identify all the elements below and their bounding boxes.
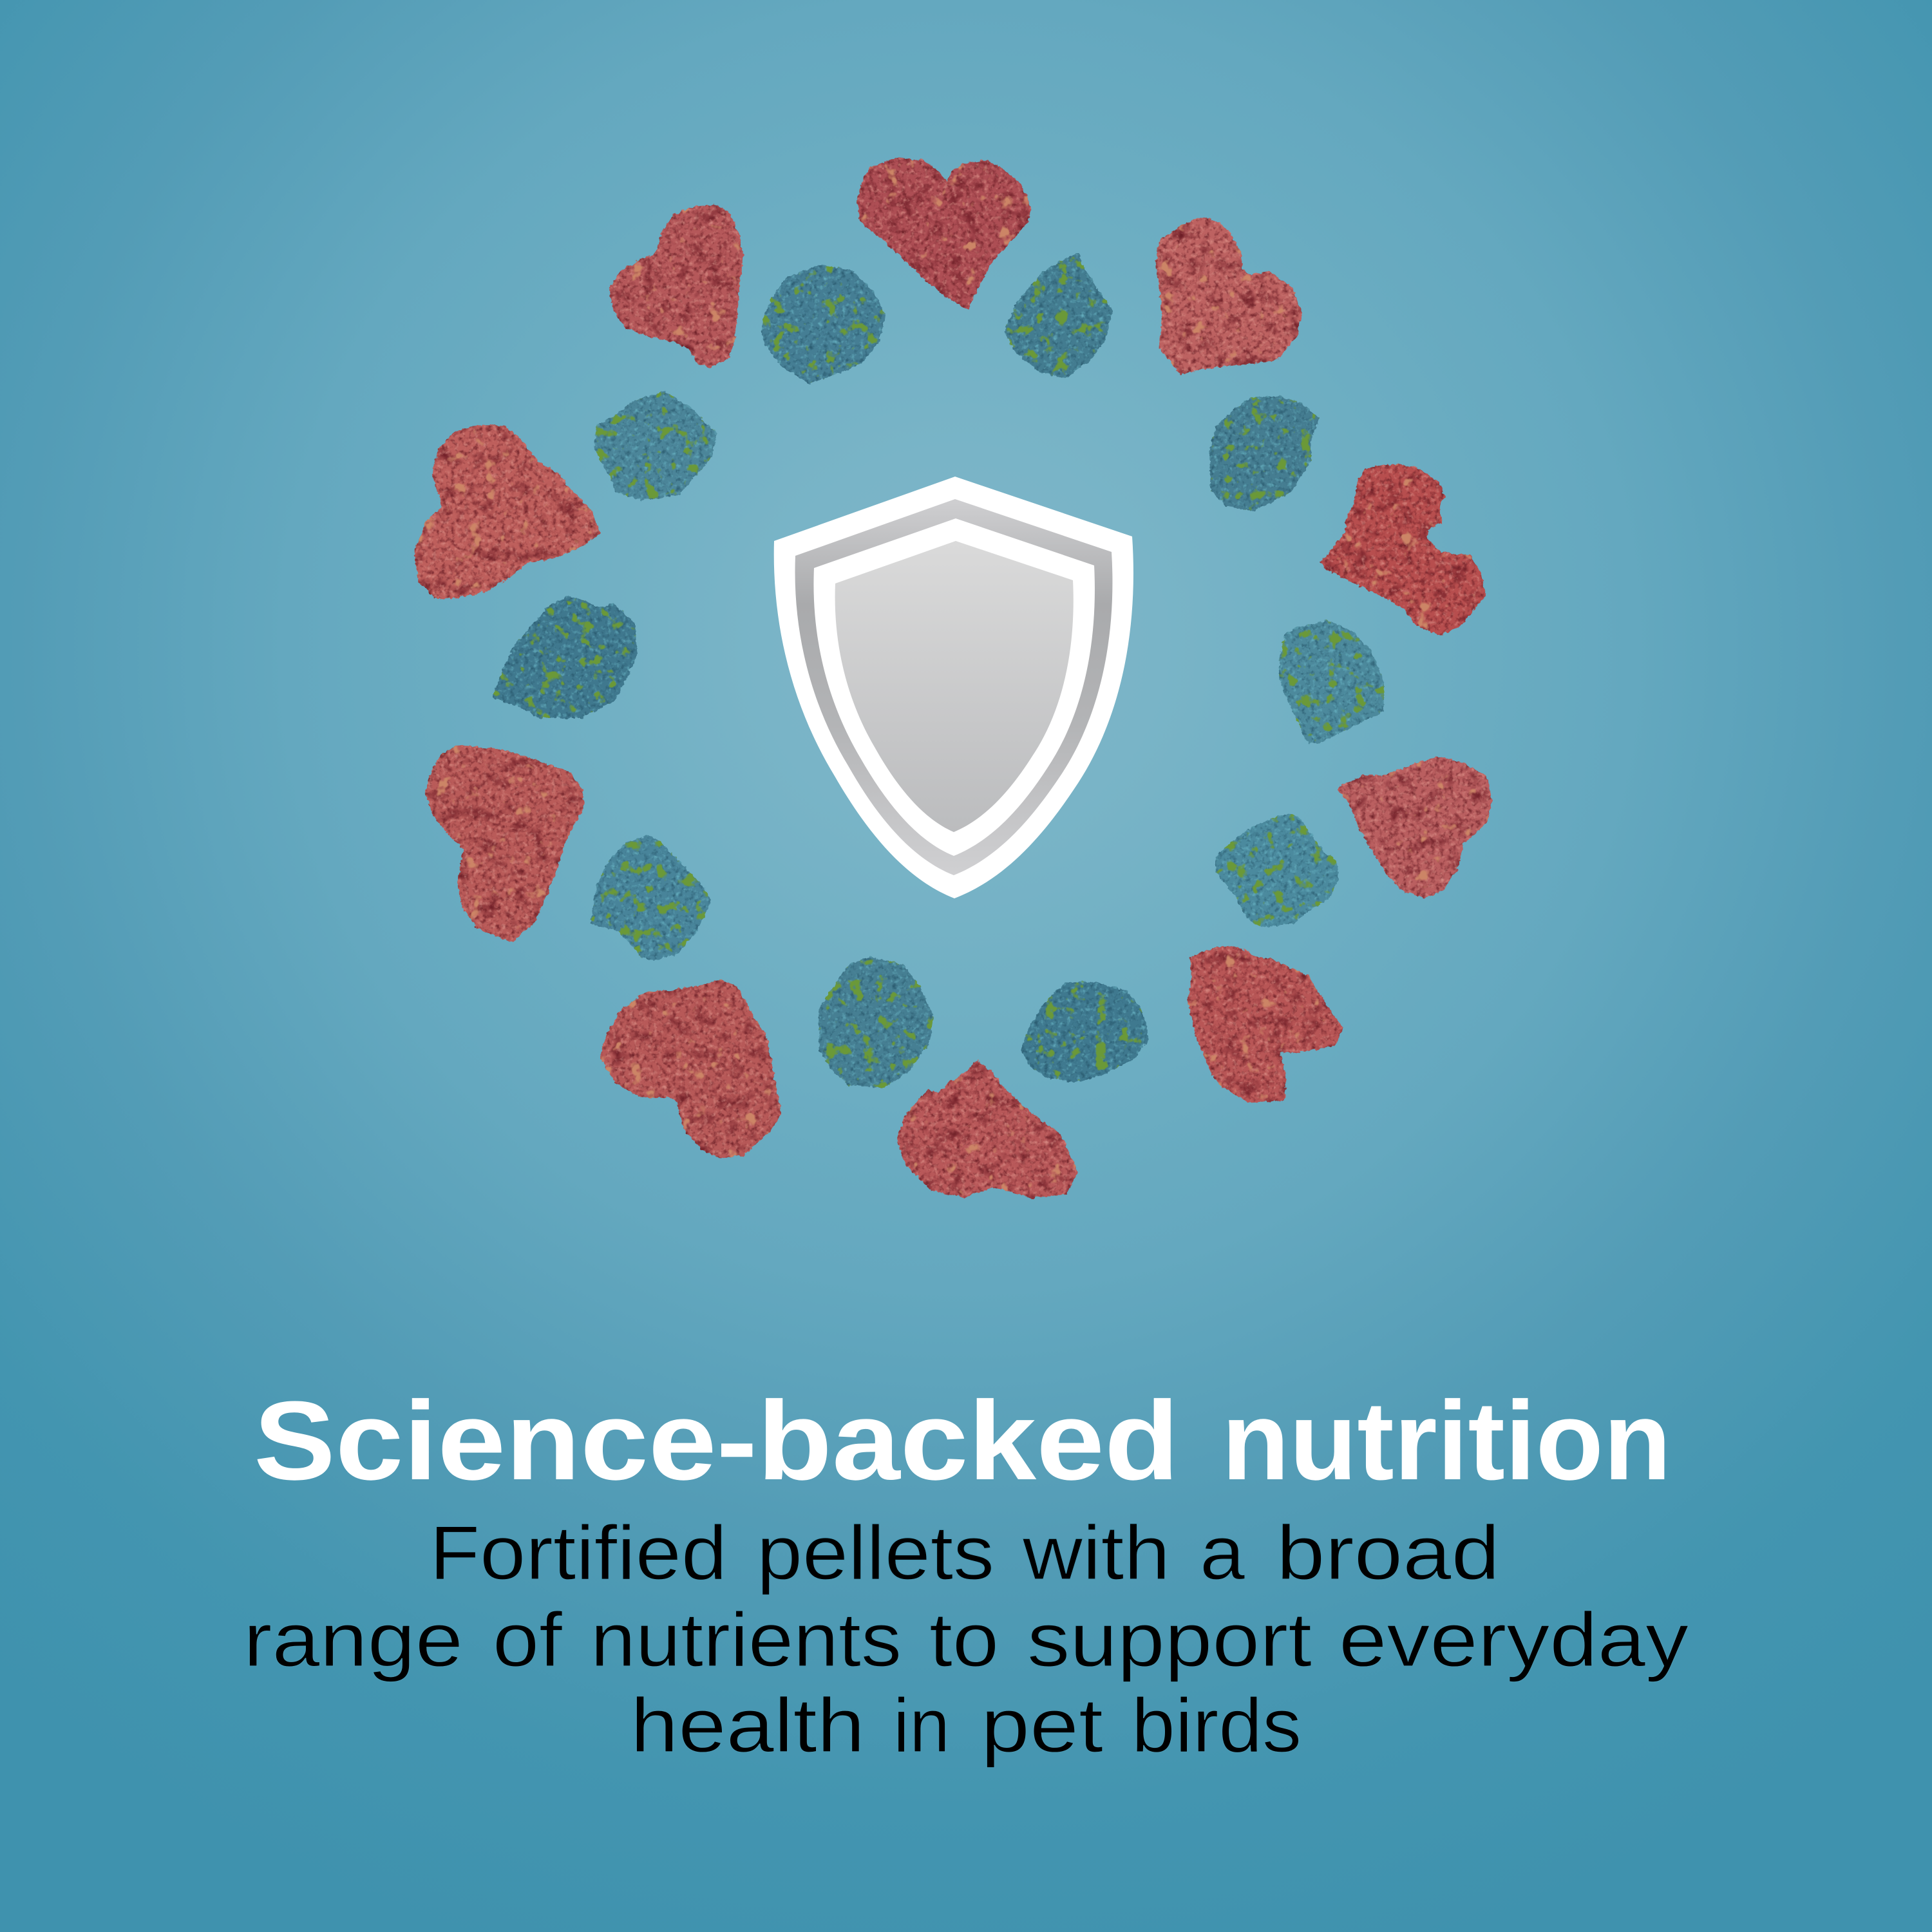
body text: birds — [1132, 1683, 1302, 1768]
blue pellet: right — [1280, 621, 1383, 743]
body text: nutrients — [591, 1597, 902, 1683]
body text: with — [1022, 1510, 1170, 1596]
blue pellet: lower right — [1217, 815, 1338, 926]
body text: of — [493, 1597, 563, 1683]
body text — [243, 1510, 1689, 1768]
heart pellet: lower right side — [1338, 757, 1491, 896]
body text: health — [630, 1683, 865, 1768]
body text: pellets — [757, 1510, 994, 1596]
body text: pet — [981, 1683, 1103, 1768]
heading — [254, 1378, 1671, 1503]
pellet ring — [415, 159, 1491, 1197]
body text: a — [1200, 1510, 1245, 1596]
body text: broad — [1276, 1510, 1500, 1596]
body text: range — [243, 1597, 463, 1683]
body text: everyday — [1339, 1597, 1689, 1683]
body text: Fortified — [430, 1510, 727, 1596]
shield icon — [774, 477, 1133, 898]
blue pellet: lower left — [592, 837, 710, 959]
heart pellet: upper left — [611, 205, 742, 366]
body text: support — [1027, 1597, 1312, 1683]
heart pellet: top — [858, 159, 1030, 308]
heart pellet: bottom left — [601, 981, 780, 1157]
blue pellet: bottom right — [1023, 983, 1147, 1081]
heading: nutrition — [1222, 1378, 1671, 1503]
heading: Science-backed — [254, 1378, 1179, 1503]
blue pellet: top left — [762, 266, 884, 382]
heart pellet: left — [415, 426, 599, 597]
blue pellet: top right — [1005, 254, 1112, 377]
body text: to — [929, 1597, 999, 1683]
blue pellet: upper right — [1211, 397, 1318, 510]
body text: in — [893, 1683, 950, 1768]
heart pellet: upper right — [1157, 218, 1301, 373]
blue pellet: left — [495, 598, 636, 717]
blue pellet: upper left — [595, 392, 715, 499]
heart pellet: bottom right — [1189, 947, 1341, 1101]
heart pellet: lower left side — [426, 746, 583, 941]
heart pellet: bottom — [898, 1062, 1076, 1197]
heart pellet: right — [1322, 465, 1484, 634]
blue pellet: bottom left — [820, 958, 932, 1086]
